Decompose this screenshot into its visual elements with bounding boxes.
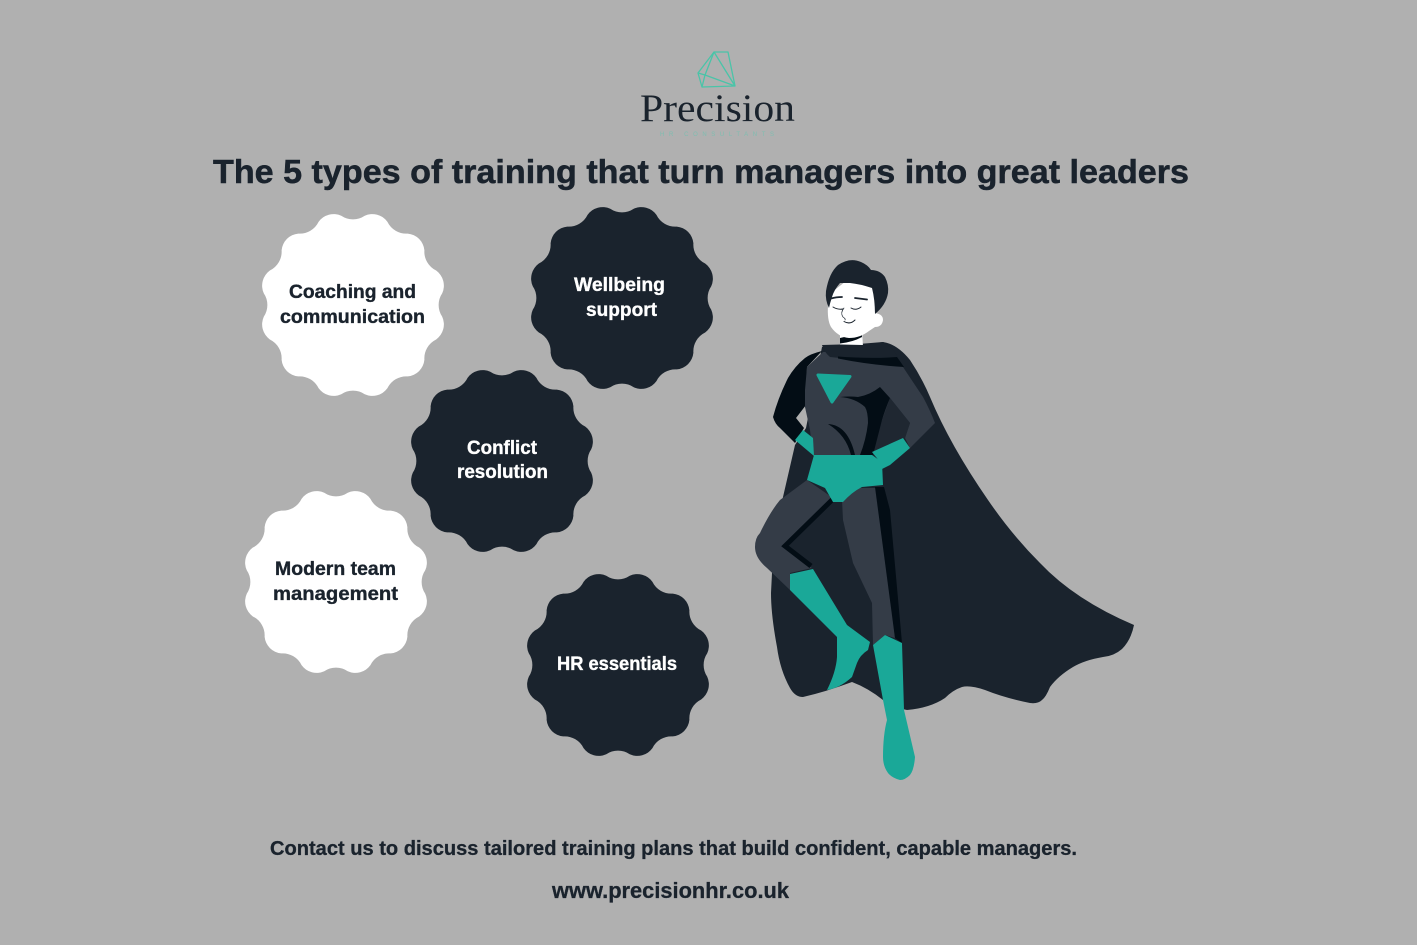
eyes, brows, nose and smile (831, 297, 867, 323)
badge: Conflict resolution: Conflict (467, 438, 538, 459)
collar (822, 342, 903, 366)
badge: Conflict resolution: resolution (457, 462, 548, 483)
badge: Modern team management: management (273, 584, 399, 605)
right leg shadow (875, 487, 902, 643)
badge: Wellbeing support: support (586, 300, 658, 321)
left glove (795, 430, 814, 456)
left arm (773, 351, 822, 443)
cape (771, 342, 1134, 710)
call to action: Contact us to discuss tailored training plans that build confident, capable managers. (270, 838, 1077, 860)
hair (826, 260, 888, 314)
briefs (807, 455, 883, 502)
website: www.precisionhr.co.uk (551, 878, 790, 903)
badge: Coaching and communication: communication (280, 307, 425, 328)
badge: Wellbeing support (531, 207, 713, 389)
badge: HR essentials (527, 574, 709, 756)
badge: Coaching and communication: Coaching and (289, 282, 416, 303)
torso shadow (840, 387, 890, 455)
left boot (790, 569, 870, 690)
badge: Coaching and communication (262, 214, 444, 396)
badge: HR essentials: HR essentials (557, 654, 677, 675)
badge: Conflict resolution (411, 370, 593, 552)
left leg shadow (785, 498, 834, 566)
inner arm gap (872, 398, 910, 453)
right leg (842, 488, 895, 645)
right boot (873, 635, 915, 780)
logo tagline: HR CONSULTANTS (660, 132, 774, 138)
logo wordmark: Precision (640, 87, 795, 130)
badge: Wellbeing support: Wellbeing (574, 275, 665, 296)
left leg (755, 480, 833, 590)
torso and right arm (805, 352, 935, 455)
face (828, 278, 883, 338)
badge: Modern team management (245, 491, 427, 673)
right glove (872, 438, 910, 470)
logo: Precision HR Consultants (640, 52, 795, 138)
superhero illustration (755, 260, 1134, 780)
title: The 5 types of training that turn managers into great leaders (213, 153, 1189, 190)
icon: teal gem outline (698, 52, 735, 87)
chest emblem (818, 375, 850, 402)
torso crease (828, 424, 855, 455)
collar shadow (838, 356, 904, 367)
neck (840, 330, 863, 347)
neck shadow (840, 333, 862, 344)
badge: Modern team management: Modern team (275, 559, 396, 580)
